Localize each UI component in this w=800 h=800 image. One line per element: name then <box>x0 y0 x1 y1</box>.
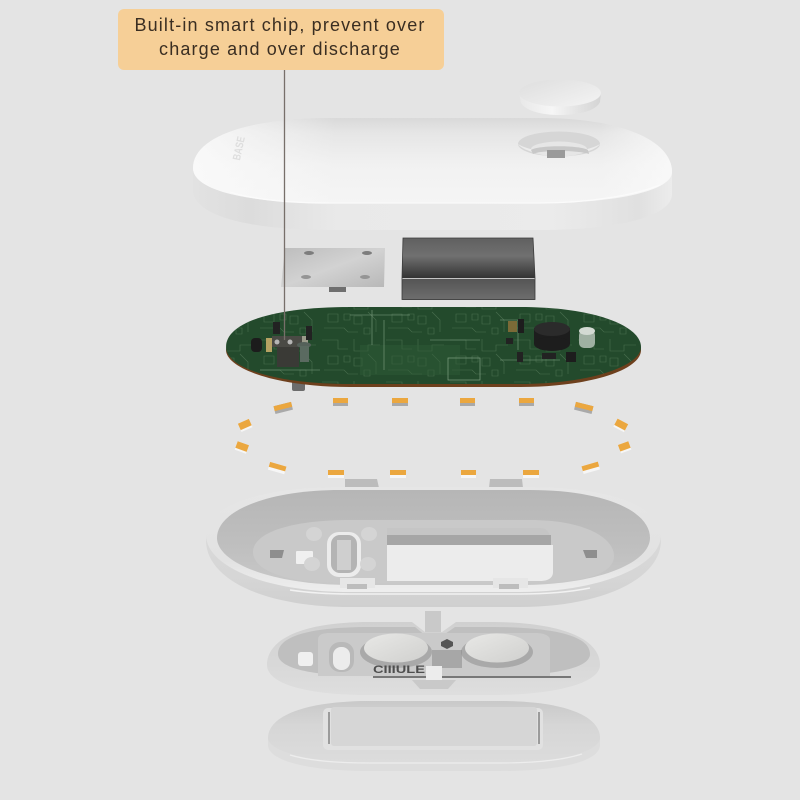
small parts <box>506 319 576 362</box>
latch and posts <box>270 527 597 577</box>
callout: Built-in smart chip, prevent over <box>134 15 426 35</box>
capacitor <box>534 322 570 351</box>
center clip <box>412 666 456 689</box>
tray window <box>387 528 553 581</box>
part: circuit board <box>226 307 641 391</box>
logo mark: BASE <box>231 135 248 161</box>
coin cell right <box>461 634 533 668</box>
coin cell left <box>360 634 432 668</box>
button opening <box>518 132 600 158</box>
part: dark battery block <box>402 238 535 300</box>
clear LED lens <box>579 327 595 348</box>
printed label marks: CIIIULE <box>373 664 425 676</box>
switch slot <box>298 642 354 672</box>
part: metal plate <box>281 248 385 292</box>
front clips <box>340 578 528 589</box>
LED ring <box>235 398 631 478</box>
callout: charge and over discharge <box>159 39 401 59</box>
callout <box>118 9 444 70</box>
part: battery holder <box>267 611 600 695</box>
chip component cluster <box>251 322 312 367</box>
leader line <box>284 70 286 340</box>
part: top shell with button opening <box>193 118 672 230</box>
part: middle tray <box>206 479 661 607</box>
part: base plate <box>268 701 600 771</box>
printed label marks <box>373 639 571 678</box>
part: round button cap <box>519 80 601 115</box>
tray clips <box>345 479 523 488</box>
